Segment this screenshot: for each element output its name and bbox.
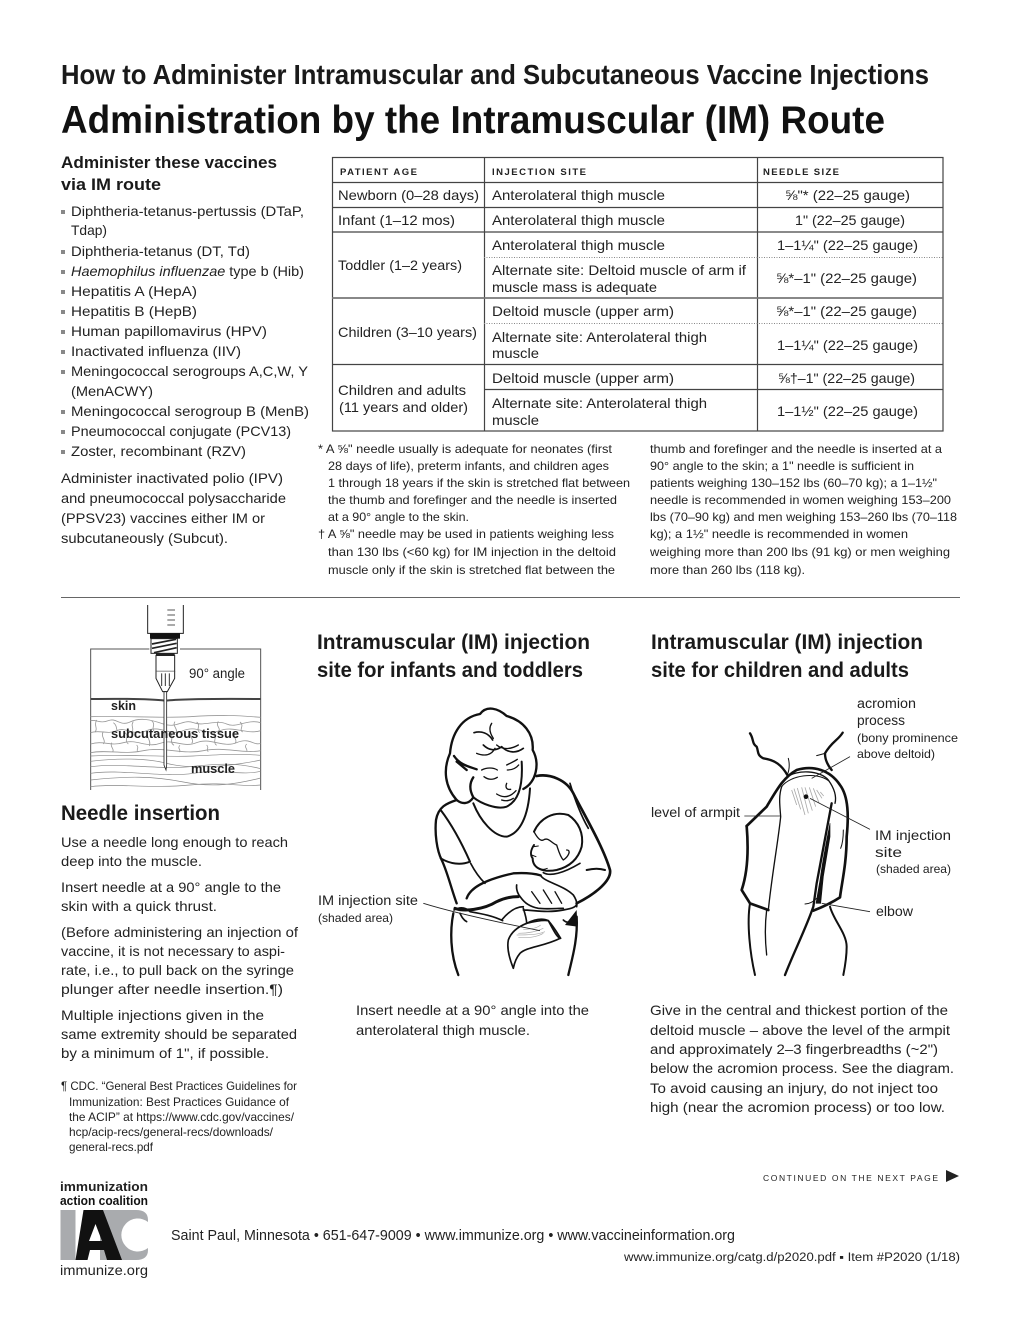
bullet list of vaccines: Human papillomavirus (HPV) xyxy=(71,323,267,339)
row: infant: Anterolateral thigh muscle xyxy=(492,212,665,228)
label: injection site xyxy=(318,893,418,925)
diaper and thigh xyxy=(502,903,577,923)
needle insertion instructions: same extremity should be separated xyxy=(61,1026,297,1042)
footnotes left column xyxy=(318,442,630,577)
tissue labels: subcutaneous tissue xyxy=(111,726,239,741)
caption: children and adults: To avoid causing an injury, do not inject too xyxy=(650,1080,938,1096)
label: injection site: IM injection site xyxy=(318,893,418,908)
footnotes right column: 90° angle to the skin; a 1" needle is sufficient in xyxy=(650,459,914,473)
table header xyxy=(340,167,839,178)
leader line xyxy=(423,903,540,931)
labels: arm diagram: process xyxy=(857,713,905,728)
labels: arm diagram: level of armpit xyxy=(651,805,740,820)
needle insertion instructions: vaccine, it is not necessary to aspi- xyxy=(61,943,285,959)
label: injection site: (shaded area) xyxy=(318,911,393,925)
heading: infants and toddlers xyxy=(317,631,590,682)
row: toddler: 1–1¼" (22–25 gauge) xyxy=(777,237,918,253)
note: polio and PPSV23: (PPSV23) vaccines either IM or xyxy=(61,510,265,526)
needle insertion instructions: by a minimum of 1", if possible. xyxy=(61,1045,269,1061)
heading: administer these vaccines: Administer these vaccines xyxy=(61,153,277,172)
tissue box xyxy=(91,649,261,790)
footnotes right column: weighing more than 200 lbs (91 kg) or men weighing xyxy=(649,545,950,559)
labels: arm diagram: (bony prominence xyxy=(857,731,958,745)
footer item reference: www.immunize.org/catg.d/p2020.pdf ▪ Item #P2020 (1/18) xyxy=(623,1252,960,1264)
needle insertion instructions: Insert needle at a 90° angle to the xyxy=(61,879,281,895)
caption: children and adults: and approximately 2–3 fingerbreadths (~2") xyxy=(650,1041,938,1057)
mother's hair xyxy=(446,709,536,800)
row: children: muscle xyxy=(492,345,539,361)
caption: infants and toddlers: Insert needle at a 90° angle into the xyxy=(356,1002,589,1018)
row: children and adults xyxy=(338,370,918,428)
caption: children and adults: below the acromion process. See the diagram. xyxy=(650,1060,954,1076)
needle insertion instructions xyxy=(61,834,298,1061)
note: polio and PPSV23 xyxy=(61,470,286,546)
title: Administration by the Intramuscular (IM) Route xyxy=(61,99,885,142)
bullet list of vaccines: Meningococcal serogroup B (MenB) xyxy=(71,403,309,419)
shaded deltoid area xyxy=(792,787,824,815)
footnotes left column: 1 through 18 years if the skin is stretched flat between xyxy=(328,476,630,490)
bullet list of vaccines: (MenACWY) xyxy=(71,383,153,399)
leader lines xyxy=(744,757,870,912)
bullet list of vaccines: Meningococcal serogroups A,C,W, Y xyxy=(71,363,309,379)
row: children: 1–1¼" (22–25 gauge) xyxy=(777,337,918,353)
bullet list of vaccines: Haemophilus influenzae type b (Hib) xyxy=(71,263,304,279)
needle insertion instructions: Use a needle long enough to reach xyxy=(61,834,288,850)
footnotes right column xyxy=(649,442,957,577)
logo: immunization action coalition: immunization xyxy=(60,1180,148,1194)
row: children: Children (3–10 years) xyxy=(338,324,477,340)
diagram: needle insertion at 90 degree angle xyxy=(91,605,261,790)
row: children and adults: Deltoid muscle (upper arm) xyxy=(492,370,674,386)
needle insertion instructions: (Before administering an injection of xyxy=(61,924,298,940)
row: children: ⅝*–1" (22–25 gauge) xyxy=(776,303,917,319)
continued on next page: CONTINUED ON THE NEXT PAGE xyxy=(763,1173,938,1183)
row: children: Deltoid muscle (upper arm) xyxy=(492,303,674,319)
footnotes left column: than 130 lbs (<60 kg) for IM injection in the deltoid xyxy=(328,545,616,559)
footnotes right column: patients weighing 130–152 lbs (60–70 kg); a 1–1½" xyxy=(650,476,937,490)
logo: immunization action coalition xyxy=(60,1180,148,1278)
panel: needle insertion xyxy=(61,802,298,1154)
row: toddler: ⅝*–1" (22–25 gauge) xyxy=(776,270,917,286)
row: children and adults: ⅝†–1" (22–25 gauge) xyxy=(778,370,915,386)
panel: vaccine list xyxy=(61,153,309,546)
caption: children and adults: deltoid muscle – above the level of the armpit xyxy=(650,1022,950,1038)
row: newborn: ⅝"* (22–25 gauge) xyxy=(785,187,910,203)
footnotes right column: thumb and forefinger and the needle is inserted at a xyxy=(650,442,942,456)
mother's torso xyxy=(436,800,457,903)
labels: arm diagram: (shaded area) xyxy=(876,862,951,876)
panel: children and adults xyxy=(650,631,958,1115)
title: How to Administer Intramuscular and Subcutaneous Vaccine Injections xyxy=(61,59,929,90)
footnotes left column: 28 days of life), preterm infants, and children ages xyxy=(328,459,609,473)
tissue labels: 90° angle xyxy=(189,666,245,681)
bullet list of vaccines: Diphtheria-tetanus-pertussis (DTaP, xyxy=(71,203,304,219)
row: toddler: Toddler (1–2 years) xyxy=(338,257,462,273)
injection point xyxy=(804,794,808,799)
baby head xyxy=(531,814,582,871)
bullet list of vaccines: Hepatitis B (HepB) xyxy=(71,303,197,319)
illustration: mother holding infant xyxy=(423,709,610,975)
needle insertion instructions: plunger after needle insertion.¶) xyxy=(61,981,283,997)
row: children and adults: Children and adults xyxy=(338,382,466,398)
syringe and needle xyxy=(148,605,183,770)
table header: NEEDLE SIZE xyxy=(763,167,839,178)
footnotes xyxy=(318,442,957,577)
heading: children and adults: Intramuscular (IM) injection xyxy=(651,631,923,654)
CDC reference note: the ACIP” at https://www.cdc.gov/vaccines/ xyxy=(69,1110,295,1124)
footnotes right column: kg); a 1½" needle is recommended in women xyxy=(650,527,908,541)
labels: arm diagram xyxy=(651,696,958,919)
heading: needle insertion: Needle insertion xyxy=(61,802,220,825)
row: toddler xyxy=(338,237,918,295)
caption: children and adults: Give in the central and thickest portion of the xyxy=(650,1002,948,1018)
row: children: Alternate site: Anterolateral thigh xyxy=(492,329,707,345)
footnotes right column: more than 260 lbs (118 kg). xyxy=(650,563,805,577)
heading: administer these vaccines xyxy=(61,153,277,194)
needle insertion instructions: skin with a quick thrust. xyxy=(61,898,217,914)
row: toddler: Alternate site: Deltoid muscle of arm if xyxy=(492,262,746,278)
caption: children and adults: high (near the acromion process) or too low. xyxy=(650,1099,945,1115)
heading: children and adults: site for children and adults xyxy=(651,659,909,682)
logo: immunization action coalition: immunize.org xyxy=(60,1263,148,1278)
CDC reference note: ¶ CDC. “General Best Practices Guidelines for xyxy=(61,1079,297,1093)
bullet list of vaccines: Diphtheria-tetanus (DT, Td) xyxy=(71,243,250,259)
caption: children and adults xyxy=(650,1002,954,1115)
CDC reference note: Immunization: Best Practices Guidance of xyxy=(69,1095,290,1109)
caption: infants and toddlers xyxy=(356,1002,589,1038)
labels: arm diagram: IM injection xyxy=(875,828,951,843)
illustration: upper arm and shoulder xyxy=(742,733,870,975)
labels: arm diagram: site xyxy=(875,845,902,860)
CDC reference note xyxy=(61,1079,297,1154)
needle insertion instructions: rate, i.e., to pull back on the syringe xyxy=(61,962,294,978)
footer contact line: Saint Paul, Minnesota • 651-647-9009 • www.immunize.org • www.vaccineinformation.org xyxy=(171,1227,735,1244)
row: children and adults: muscle xyxy=(492,412,539,428)
row: toddler: Anterolateral thigh muscle xyxy=(492,237,665,253)
row: children and adults: (11 years and older) xyxy=(339,399,468,415)
logo: immunization action coalition: action coalition xyxy=(60,1194,148,1208)
shaded injection area xyxy=(517,925,545,938)
labels: arm diagram: acromion xyxy=(857,696,916,711)
bullet list of vaccines: Inactivated influenza (IIV) xyxy=(71,343,241,359)
footnotes left column: at a 90° angle to the skin. xyxy=(328,510,469,524)
tissue labels xyxy=(111,666,245,776)
row: children xyxy=(338,303,918,361)
heading: infants and toddlers: site for infants and toddlers xyxy=(317,659,583,682)
lap xyxy=(451,913,458,975)
note: polio and PPSV23: Administer inactivated polio (IPV) xyxy=(61,470,283,486)
heading: administer these vaccines: via IM route xyxy=(61,175,161,194)
row: infant xyxy=(338,212,905,228)
footnotes left column: the thumb and forefinger and the needle is inserted xyxy=(328,493,617,507)
note: polio and PPSV23: subcutaneously (Subcut). xyxy=(61,530,228,546)
CDC reference note: general-recs.pdf xyxy=(69,1140,154,1154)
bullet list of vaccines: Hepatitis A (HepA) xyxy=(71,283,197,299)
face xyxy=(473,762,522,808)
needle insertion instructions: Multiple injections given in the xyxy=(61,1007,264,1023)
footnotes left column: * A ⅝" needle usually is adequate for neonates (first xyxy=(318,442,613,456)
footnotes left column: muscle only if the skin is stretched flat between the xyxy=(328,563,615,577)
panel: infants and toddlers xyxy=(317,631,610,1038)
mother's arm and hand xyxy=(467,873,541,898)
tissue labels: skin xyxy=(111,698,136,713)
heading: children and adults xyxy=(651,631,923,682)
continued on next page xyxy=(763,1170,959,1183)
footnotes right column: lbs (70–90 kg) and men weighing 153–260 lbs (70–118 xyxy=(650,510,957,524)
table header: INJECTION SITE xyxy=(492,167,586,178)
tissue labels: muscle xyxy=(191,761,235,776)
needle insertion instructions: deep into the muscle. xyxy=(61,853,202,869)
row: newborn xyxy=(338,187,910,203)
table header: PATIENT AGE xyxy=(340,167,417,178)
row: infant: 1" (22–25 gauge) xyxy=(795,212,905,228)
footnotes right column: needle is recommended in women weighing 153–200 xyxy=(650,493,951,507)
labels: arm diagram: elbow xyxy=(876,904,913,919)
note: polio and PPSV23: and pneumococcal polysaccharide xyxy=(61,490,286,506)
bullet list of vaccines xyxy=(61,203,309,459)
caption: infants and toddlers: anterolateral thigh muscle. xyxy=(356,1022,530,1038)
row: newborn: Anterolateral thigh muscle xyxy=(492,187,665,203)
heading: infants and toddlers: Intramuscular (IM) injection xyxy=(317,631,590,654)
bullet list of vaccines: Pneumococcal conjugate (PCV13) xyxy=(71,423,291,439)
bullet list of vaccines: Zoster, recombinant (RZV) xyxy=(71,443,246,459)
row: infant: Infant (1–12 mos) xyxy=(338,212,455,228)
table: patient age, injection site, needle size xyxy=(332,157,943,431)
row: newborn: Newborn (0–28 days) xyxy=(338,187,479,203)
bullet list of vaccines: Tdap) xyxy=(71,222,107,238)
footnotes left column: † A ⅝" needle may be used in patients weighing less xyxy=(318,527,614,541)
CDC reference note: hcp/acip-recs/general-recs/downloads/ xyxy=(69,1125,274,1139)
title xyxy=(61,59,929,142)
labels: arm diagram: above deltoid) xyxy=(857,747,935,761)
row: toddler: muscle mass is adequate xyxy=(492,279,657,295)
row: children and adults: Alternate site: Anterolateral thigh xyxy=(492,395,707,411)
row: children and adults: 1–1½" (22–25 gauge) xyxy=(777,403,918,419)
